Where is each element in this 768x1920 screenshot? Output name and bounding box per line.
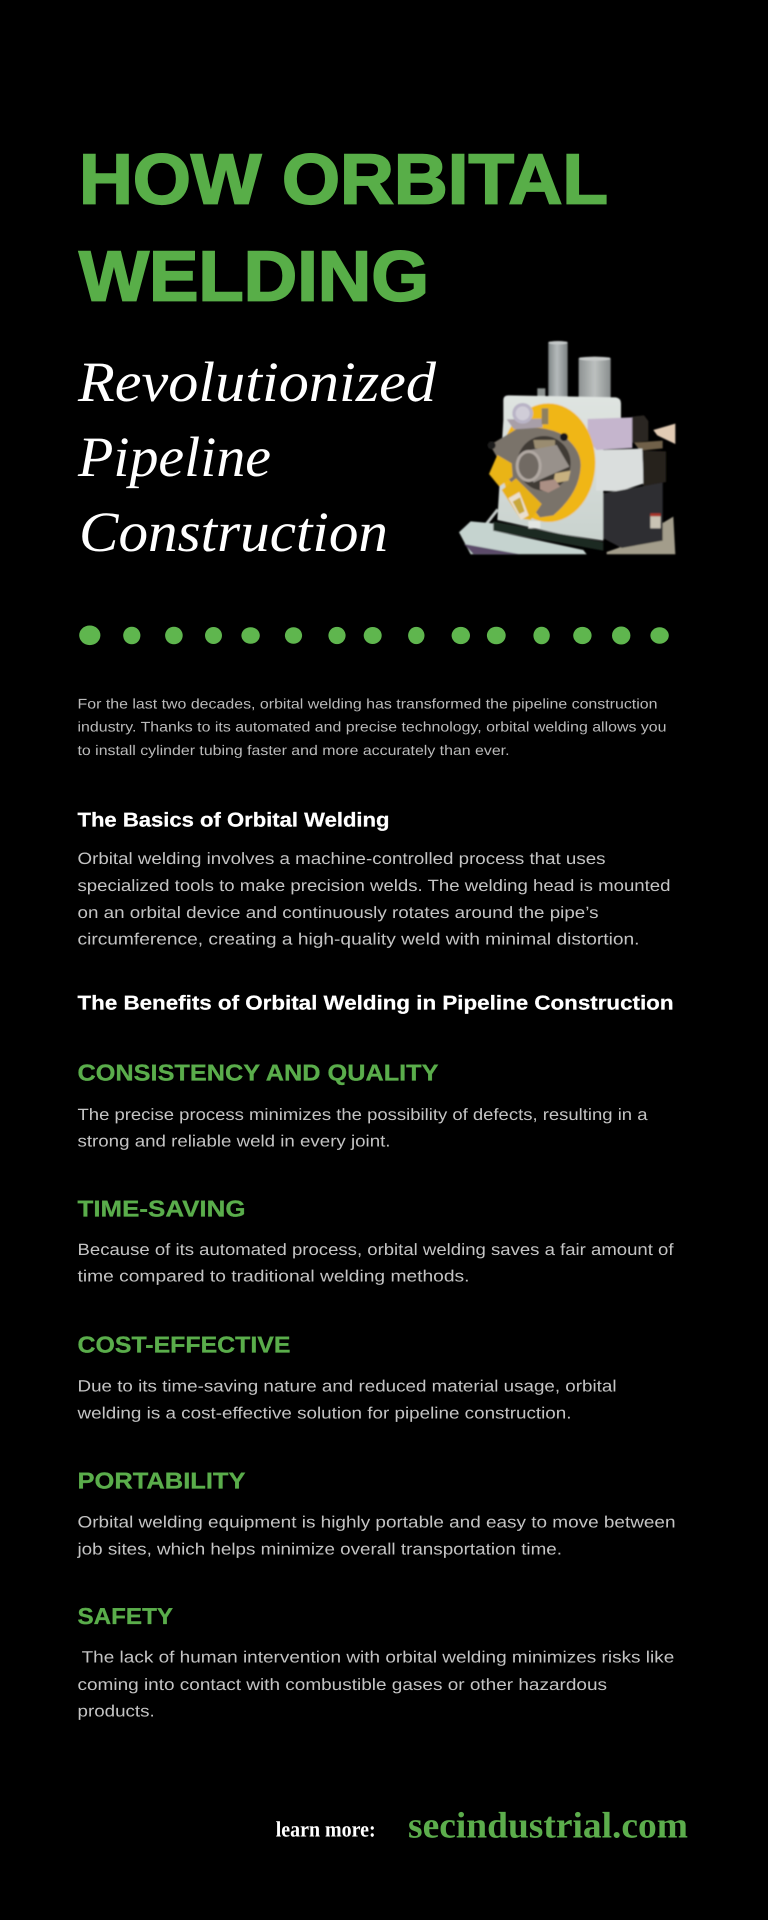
benefit: portability	[76, 1467, 675, 1558]
intro text: to install cylinder tubing faster and more accurately than ever.	[78, 742, 510, 758]
paragraph: the basics: circumference, creating a high-quality weld with minimal distortion.	[78, 931, 640, 949]
intro text	[78, 696, 666, 758]
intro text: For the last two decades, orbital welding has transformed the pipeline construction	[78, 696, 658, 712]
benefit: consistency and quality: The precise process minimizes the possibility of defects, resulting in a	[78, 1106, 648, 1124]
paragraph: the basics: on an orbital device and continuously rotates around the pipe’s	[78, 904, 598, 922]
benefit: cost-effective: COST-EFFECTIVE	[78, 1332, 290, 1358]
benefit: cost-effective: welding is a cost-effective solution for pipeline construction.	[76, 1404, 571, 1422]
paragraph: the basics: Orbital welding involves a machine-controlled process that uses	[78, 850, 606, 868]
benefit: time-saving: time compared to traditional welding methods.	[78, 1268, 470, 1286]
benefit: safety: SAFETY	[78, 1603, 173, 1629]
intro text: industry. Thanks to its automated and precise technology, orbital welding allows you	[78, 719, 666, 735]
benefit: consistency and quality: strong and reliable weld in every joint.	[78, 1133, 390, 1151]
footer: learn more: secindustrial.com	[408, 1805, 688, 1846]
benefit: consistency and quality: CONSISTENCY AND QUALITY	[78, 1060, 438, 1086]
benefit: cost-effective: Due to its time-saving nature and reduced material usage, orbital	[78, 1378, 616, 1396]
subtitle: Revolutionized	[77, 351, 437, 414]
subtitle: Pipeline	[77, 426, 271, 489]
benefit: safety: The lack of human intervention with orbital welding minimizes risks like	[82, 1649, 674, 1667]
benefit: portability: job sites, which helps minimize overall transportation time.	[76, 1540, 562, 1558]
benefit: time-saving: TIME-SAVING	[78, 1196, 246, 1222]
subtitle: Construction	[79, 501, 388, 564]
paragraph: the basics: specialized tools to make precision welds. The welding head is mounted	[78, 877, 670, 895]
benefit: time-saving: Because of its automated process, orbital welding saves a fair amount of	[78, 1241, 674, 1259]
benefit: portability: PORTABILITY	[78, 1467, 246, 1493]
benefit: consistency and quality	[78, 1060, 648, 1151]
title	[79, 140, 608, 316]
icon: orbital welding machine	[459, 341, 675, 554]
benefit: safety: coming into contact with combustible gases or other hazardous	[78, 1676, 607, 1694]
title: HOW ORBITAL	[79, 140, 608, 220]
benefit: portability: Orbital welding equipment is highly portable and easy to move between	[78, 1514, 676, 1532]
heading: the basics: The Basics of Orbital Welding	[78, 810, 390, 832]
dotted divider	[79, 626, 669, 645]
title: WELDING	[79, 238, 429, 316]
benefit: safety: products.	[78, 1703, 155, 1721]
benefit: cost-effective	[76, 1332, 616, 1422]
benefit: safety	[78, 1603, 674, 1721]
heading: the benefits: The Benefits of Orbital Welding in Pipeline Construction	[78, 992, 674, 1014]
footer: learn more	[276, 1805, 688, 1846]
paragraph: the basics	[78, 850, 670, 949]
subtitle	[77, 351, 437, 564]
footer: learn more: learn more:	[276, 1817, 376, 1842]
benefit: time-saving	[78, 1196, 674, 1286]
